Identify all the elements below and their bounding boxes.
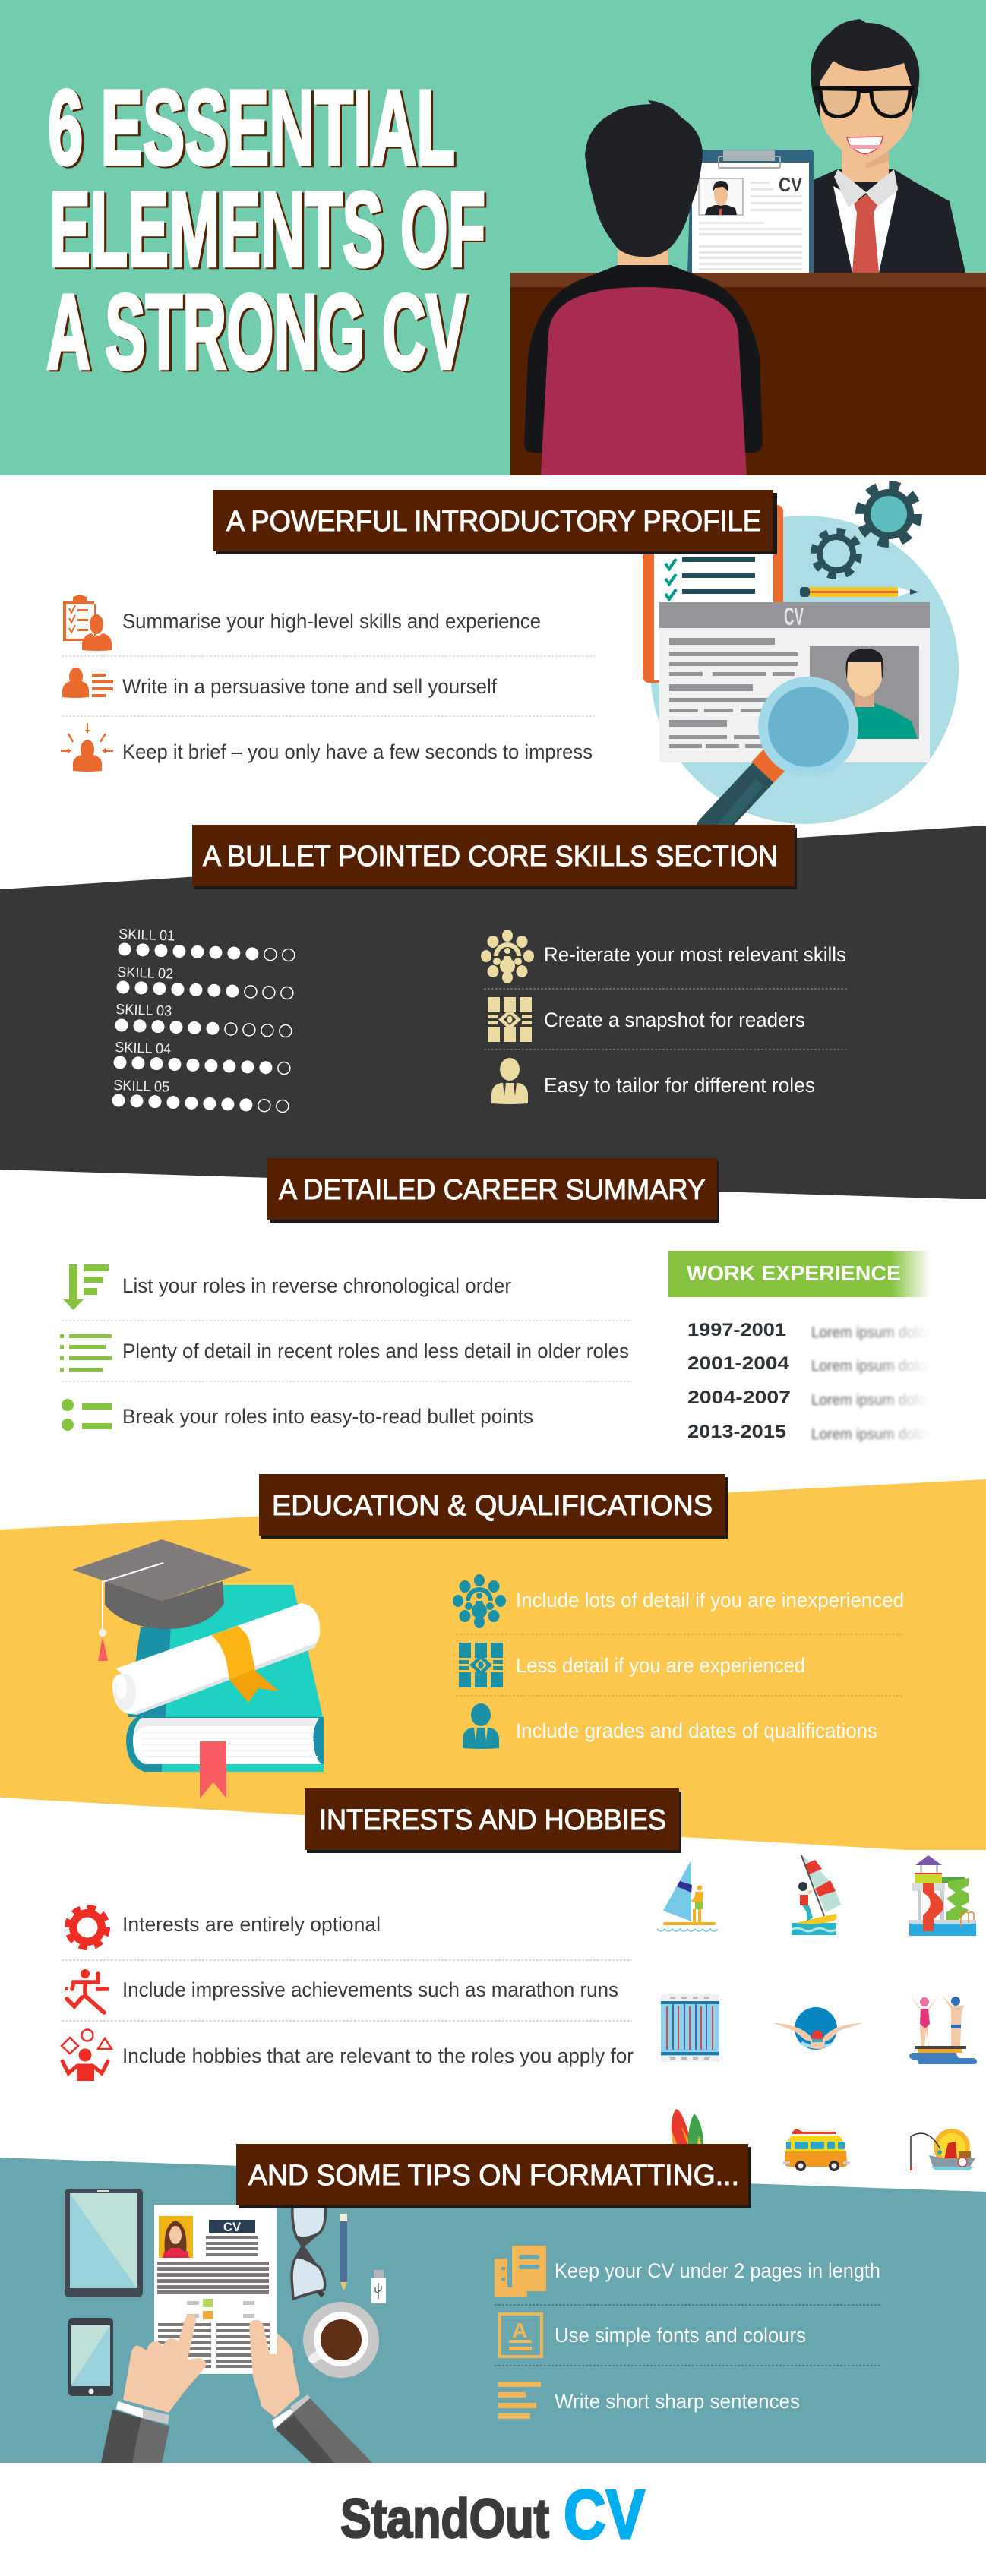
title: [46, 68, 485, 391]
icon: phone: [68, 2318, 113, 2396]
CV paper: [154, 2205, 277, 2374]
icon: text lines: [498, 2382, 541, 2419]
graduation cap: [72, 1539, 252, 1661]
card heading: [668, 1251, 931, 1297]
text: List your roles in reverse chronological order: [122, 1274, 511, 1297]
list item: snapshot: [488, 997, 805, 1042]
skill row 02: [116, 964, 293, 999]
title: A STRONG CV: [46, 272, 466, 391]
list item: bullet points: [62, 1399, 533, 1431]
icon: surfboards: [672, 2109, 703, 2144]
text: Re-iterate your most relevant skills: [544, 943, 846, 966]
skill row 03: SKILL 03: [115, 1002, 172, 1020]
icon: network: [481, 930, 534, 983]
skill row 05: SKILL 05: [113, 1078, 170, 1096]
timeline rows: 2001-2004: [687, 1353, 790, 1374]
list item: marathon: [65, 1969, 618, 2012]
coffee cup: [303, 2302, 379, 2378]
text: Write short sharp sentences: [555, 2390, 800, 2413]
text: Write in a persuasive tone and sell yourself: [122, 675, 498, 698]
heading: a detailed career summary: [267, 1158, 719, 1223]
icon: businessman: [491, 1058, 528, 1104]
skill row 01: SKILL 01: [119, 927, 175, 945]
USB stick: [371, 2270, 386, 2303]
icon: swimming pool: [661, 1994, 719, 2062]
list item: fonts: [500, 2314, 806, 2357]
list item: grades: [463, 1703, 877, 1749]
title: 6 ESSENTIAL: [48, 68, 455, 187]
panel: section 6 formatting: [65, 2189, 881, 2463]
timeline rows: Lorem ipsum dolor: [811, 1324, 931, 1341]
text: Include grades and dates of qualifications: [516, 1719, 877, 1742]
timeline rows: Lorem ipsum dolor: [811, 1358, 931, 1375]
icon: synchronized swimmers: [909, 1995, 977, 2064]
illustration: interviewer: [811, 19, 965, 273]
upper book: [128, 1585, 323, 1717]
timeline rows: Lorem ipsum dolor: [811, 1392, 931, 1409]
text: Easy to tailor for different roles: [544, 1074, 815, 1097]
timeline rows: 1997-2001: [687, 1320, 786, 1340]
panel: section 3 career summary: [60, 1251, 931, 1443]
list item: inexperienced: [453, 1574, 904, 1628]
heading: interests and hobbies: INTERESTS AND HOBBIES: [319, 1804, 666, 1836]
heading: and some tips on formatting: [236, 2144, 751, 2208]
text: Keep it brief – you only have a few seconds to impress: [122, 740, 593, 763]
diploma: [112, 1603, 320, 1715]
illustration: books, diploma and cap: [72, 1539, 324, 1798]
icon: eye grid: [488, 997, 532, 1042]
icon: camper van: [783, 2129, 850, 2171]
list item: optional: [68, 1908, 381, 1947]
icon: down arrow list: [63, 1264, 109, 1310]
list item: plenty of detail: [60, 1334, 629, 1372]
text: Keep your CV under 2 pages in length: [555, 2259, 880, 2282]
icon: runner: [65, 1969, 109, 2012]
icon: bullets: [62, 1399, 112, 1431]
panel: section 1 profile: [61, 485, 959, 829]
icon: water slide tower: [909, 1855, 976, 1936]
left hand and sleeve: [101, 2314, 207, 2463]
list item: reverse order: [63, 1264, 511, 1310]
panel: blue formatting band: [0, 2158, 986, 2463]
photo: man: [845, 649, 918, 739]
skill row 01: [118, 927, 295, 961]
illustration: desk with tablet, phone, CV and hands: [65, 2189, 386, 2463]
heading: education and qualifications: EDUCATION & QUALIFICATIONS: [272, 1490, 713, 1522]
text: Create a snapshot for readers: [544, 1009, 805, 1031]
icon: tablet: [65, 2189, 143, 2297]
panel: header: [0, 0, 986, 475]
heading: and some tips on formatting: AND SOME TIPS ON FORMATTING...: [248, 2160, 739, 2192]
timeline rows: 2004-2007: [687, 1387, 791, 1408]
illustration: CV under magnifying glass: CV: [784, 602, 804, 630]
skill row 02: SKILL 02: [117, 964, 174, 983]
icon: large gear: [860, 485, 918, 543]
right hand and sleeve: [249, 2320, 372, 2463]
icon: person with arrows: [61, 723, 113, 772]
glasses: [292, 2206, 325, 2299]
icon: windsurfer: [792, 1855, 841, 1935]
icon: juggler: [62, 2029, 112, 2081]
text: Include hobbies that are relevant to the roles you apply for: [122, 2044, 634, 2067]
logo: StandOut CV: CV: [564, 2477, 645, 2553]
pencil: [340, 2214, 347, 2291]
heading: a powerful introductory profile: A POWERFUL INTRODUCTORY PROFILE: [226, 506, 761, 538]
panel: dark skills band: [0, 826, 986, 1199]
heading: a detailed career summary: A DETAILED CAREER SUMMARY: [279, 1174, 706, 1206]
icon: network: [453, 1574, 506, 1628]
text: Break your roles into easy-to-read bullet points: [122, 1405, 533, 1428]
illustration: clipboard with CV: [687, 150, 814, 273]
panel: section 2 core skills: [112, 927, 847, 1113]
text: Plenty of detail in recent roles and less detail in older roles: [122, 1340, 629, 1362]
illustration: clipboard with CV: CV: [779, 173, 803, 196]
icon: small gear: [814, 532, 858, 576]
list item: keep it brief: [61, 723, 593, 772]
panel: yellow education band: [0, 1479, 986, 1850]
skill row 05: [112, 1078, 289, 1113]
logo: StandOut CV: [340, 2477, 645, 2553]
panel: section 5 interests: [62, 1855, 977, 2171]
icon: magnifying glass: [710, 677, 858, 829]
text: Include impressive achievements such as marathon runs: [122, 1978, 618, 2001]
heading: a powerful introductory profile: [213, 490, 777, 554]
list item: relevant hobbies: [62, 2029, 634, 2081]
text: Use simple fonts and colours: [555, 2324, 806, 2347]
lower book: [126, 1717, 324, 1772]
list item: re-iterate skills: [481, 930, 846, 983]
work experience card: [668, 1251, 931, 1443]
bookmark: [200, 1741, 226, 1798]
text: Summarise your high-level skills and experience: [122, 610, 541, 633]
chart: skill ratings: [112, 927, 295, 1113]
text: Include lots of detail if you are inexperienced: [516, 1589, 904, 1612]
icon: person with lines: [62, 668, 113, 698]
heading: a bullet pointed core skills section: [192, 825, 797, 889]
heading: a bullet pointed core skills section: A BULLET POINTED CORE SKILLS SECTION: [203, 841, 778, 873]
icon: gear: [68, 1908, 107, 1947]
icon: clipboard person: [63, 595, 112, 651]
heading: interests and hobbies: [305, 1788, 681, 1853]
timeline rows: 2013-2015: [687, 1422, 786, 1442]
icon: paddleboarder: [657, 1860, 718, 1931]
illustration: desk: [510, 273, 986, 475]
timeline rows: Lorem ipsum dolor: [811, 1426, 931, 1443]
CV paper: CV: [223, 2220, 242, 2234]
text: Interests are entirely optional: [122, 1913, 381, 1936]
icon: letter A page: A: [512, 2319, 527, 2342]
list item: summarise: [63, 595, 541, 651]
icon: fishing boat: [910, 2129, 975, 2170]
icon: pages: [495, 2246, 546, 2297]
icon: eye grid: [459, 1643, 503, 1687]
heading: education and qualifications: [259, 1474, 728, 1539]
list item: experienced: [459, 1643, 805, 1687]
list item: tailor: [491, 1058, 815, 1104]
panel: section 4 education: [72, 1539, 904, 1798]
illustration: CV under magnifying glass: [643, 485, 959, 829]
logo: StandOut CV: StandOut: [340, 2489, 549, 2549]
timeline rows: [687, 1320, 931, 1443]
list item: persuasive tone: [62, 668, 498, 698]
icon: businessman: [463, 1703, 499, 1749]
skill row 04: SKILL 04: [115, 1040, 172, 1058]
icon: diver: [773, 2007, 863, 2050]
icon: letter A page: [500, 2314, 542, 2357]
title: ELEMENTS OF: [49, 169, 485, 289]
illustration: candidate seen from behind: [524, 100, 763, 475]
list item: sentences: [498, 2382, 800, 2419]
icon: pencil: [800, 587, 919, 597]
skill row 03: [115, 1002, 292, 1037]
card heading: WORK EXPERIENCE: [687, 1261, 901, 1285]
icon: detailed list: [60, 1334, 112, 1372]
skill row 04: [113, 1040, 290, 1075]
list item: length: [495, 2246, 880, 2297]
text: Less detail if you are experienced: [516, 1654, 805, 1677]
